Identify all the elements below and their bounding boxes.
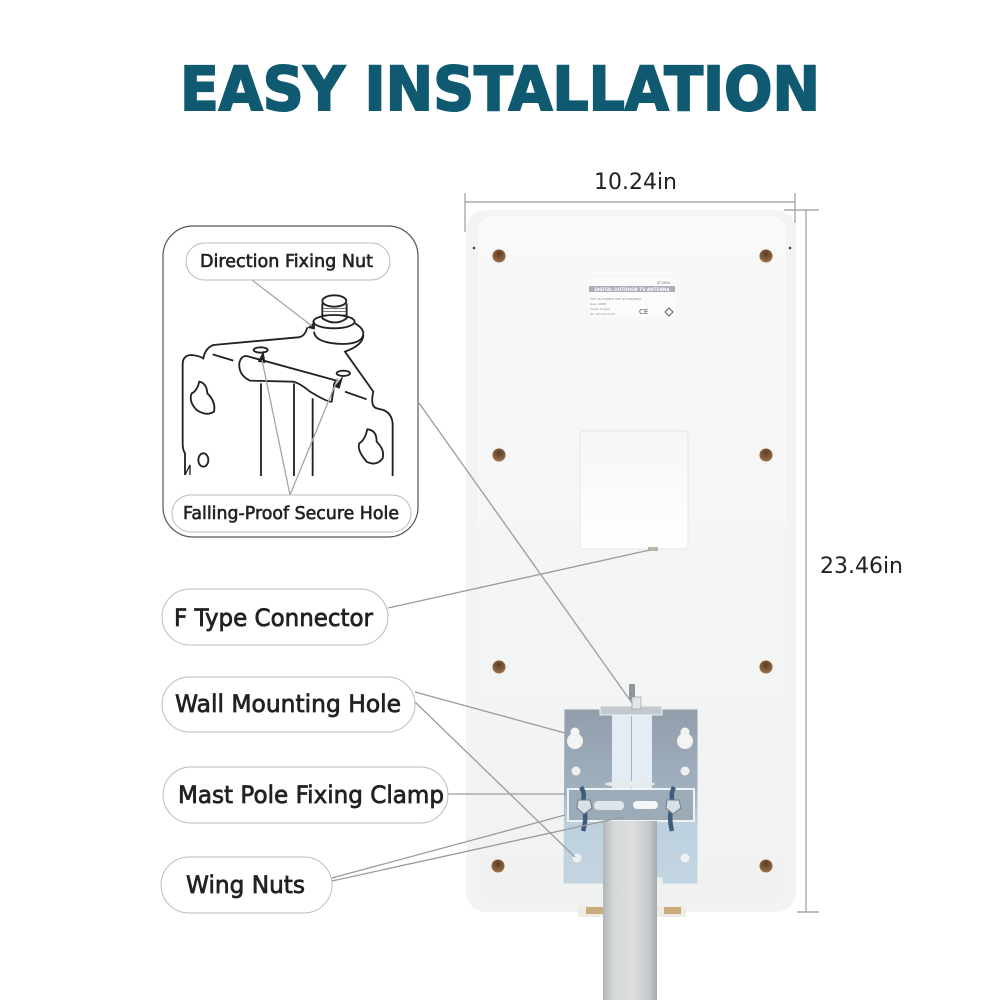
height label: 23.46in [820,554,903,579]
mounting holes [491,249,773,873]
callout: mast pole fixing clamp: Mast Pole Fixing Clamp [178,781,444,809]
product label: KT-4608 [657,281,670,285]
callout: wall mounting hole [162,677,415,732]
product label [587,277,677,318]
panel: detail diagram [163,226,418,537]
product label: VHF 40-230MHz UHF 470-862MHz [590,297,641,301]
callout: falling-proof secure hole [172,495,411,532]
connector cover box [580,431,688,551]
product label: DC 12V Products [590,312,616,316]
antenna panel [466,210,796,917]
detail leader lines [252,280,338,495]
keyholes [567,728,693,749]
bottom feet [578,906,686,917]
product label: CE [639,308,648,316]
callout: wall mounting hole: Wall Mounting Hole [175,690,401,718]
callout: F type connector: F Type Connector [174,604,373,632]
title: EASY INSTALLATION [180,54,820,125]
height dimension [784,210,819,912]
leader lines [332,403,650,881]
mounting bracket [563,684,698,884]
line drawing of bracket [183,295,393,476]
product label: Power Supply [590,307,610,311]
edge dots [473,247,791,249]
callout: direction fixing nut: Direction Fixing Nut [200,252,373,272]
mast pole [603,821,657,1000]
callout: F type connector [162,589,388,645]
product label: Gain 40dB [590,302,606,306]
callout: mast pole fixing clamp [163,767,448,823]
width dimension [465,193,795,232]
width label: 10.24in [594,170,677,195]
callout: wing nuts: Wing Nuts [186,871,305,899]
callout: falling-proof secure hole: Falling-Proof Secure Hole [183,504,399,524]
callout: wing nuts [161,857,332,913]
callout: direction fixing nut [186,243,390,280]
product label: DIGITAL OUTDOOR TV ANTENNA [594,287,670,292]
